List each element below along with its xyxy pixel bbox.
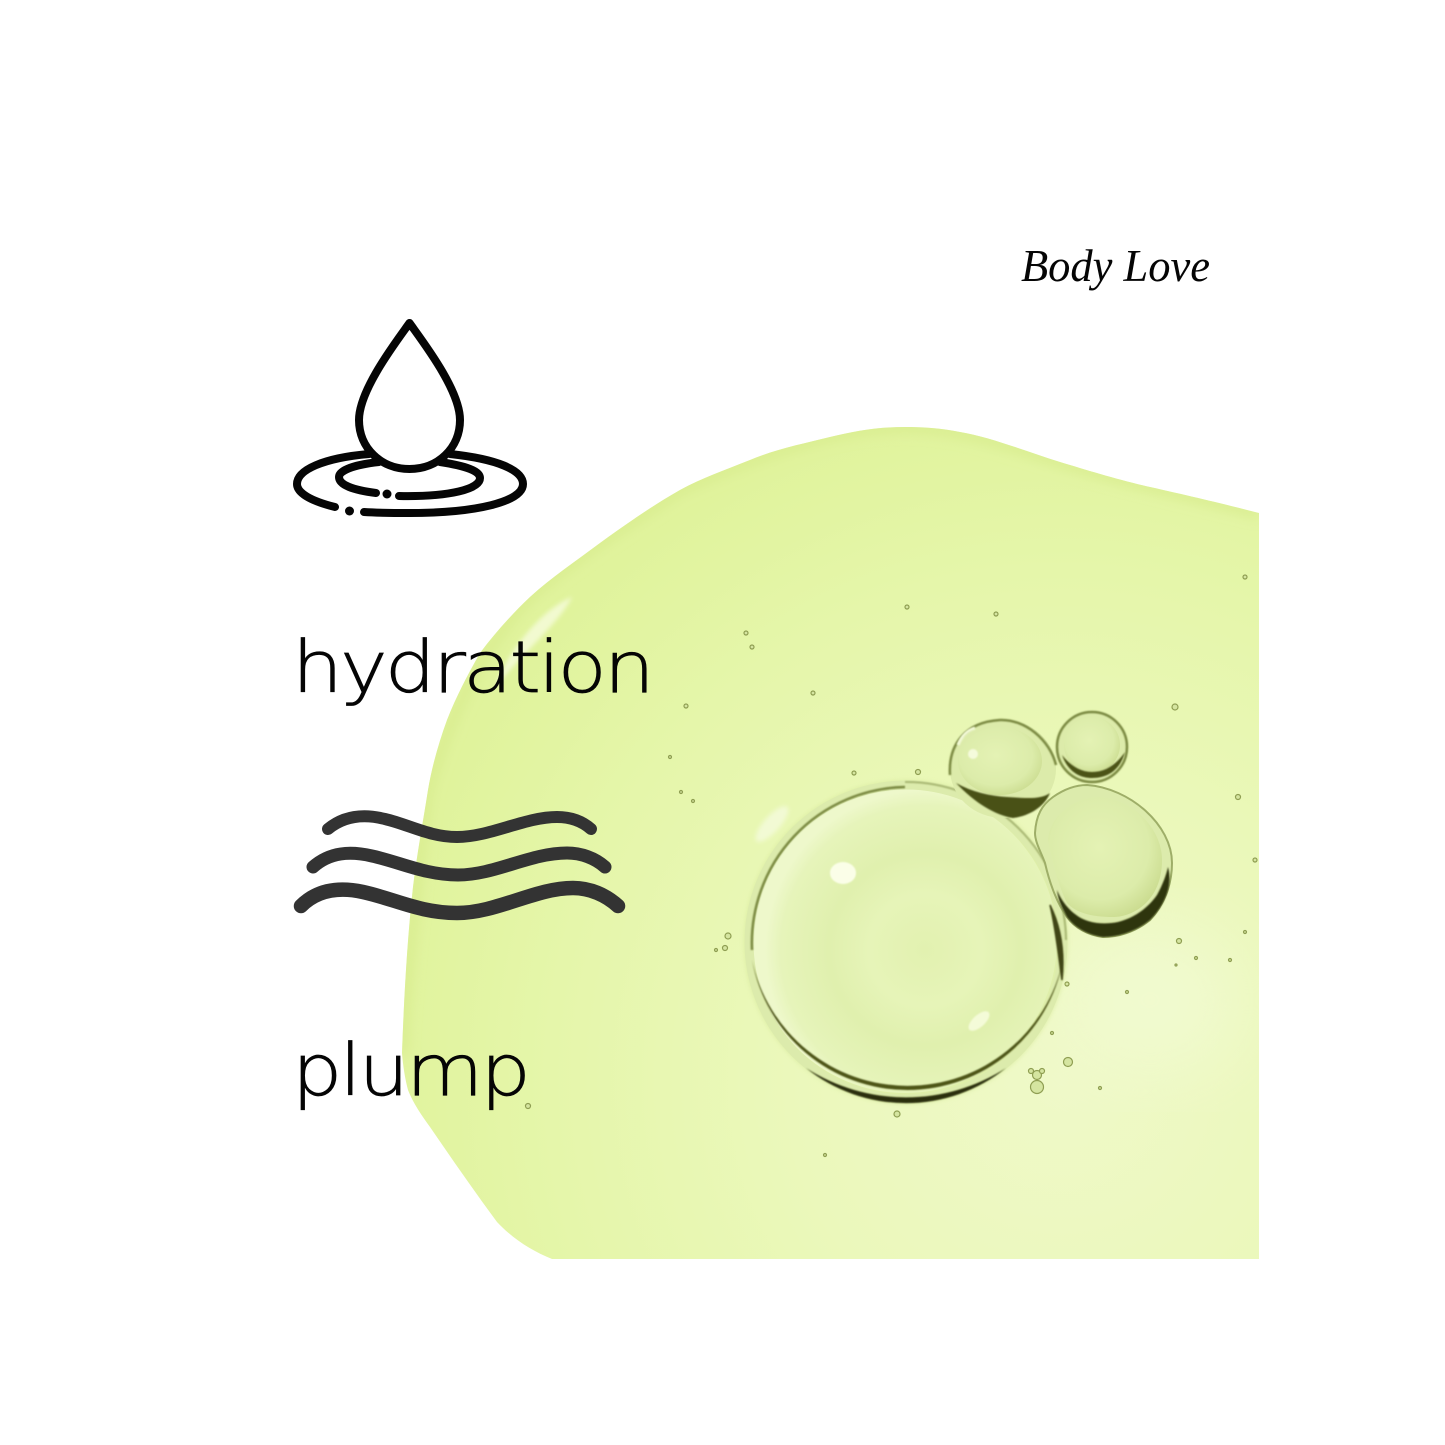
small bubble upper left — [950, 720, 1056, 818]
dark crescent — [1057, 867, 1169, 937]
brand name: Body Love — [1021, 240, 1210, 291]
icon: water drop with ripples — [297, 323, 523, 516]
wave three — [301, 888, 618, 913]
large bubble — [744, 780, 1068, 1104]
wave two — [313, 853, 605, 875]
bubble glints — [830, 862, 856, 884]
dark rim crescent — [752, 960, 1063, 1090]
label: plump: plump — [292, 1029, 528, 1112]
oil swatch — [390, 410, 1270, 1270]
small bubble top — [1056, 711, 1128, 783]
drop — [359, 323, 460, 469]
highlight by large bubble — [754, 805, 790, 843]
wave one — [328, 816, 591, 837]
tiny air bubbles — [526, 575, 1257, 1156]
inner ripple — [399, 462, 480, 496]
highlight on swatch edge — [495, 597, 572, 688]
oval bubble right — [1035, 785, 1172, 937]
icon: waves — [301, 816, 618, 913]
label: hydration: hydration — [292, 626, 652, 709]
infographic canvas — [293, 249, 1259, 1259]
outer ripple — [364, 454, 523, 513]
inner ripple left — [339, 462, 379, 493]
ripple dots — [345, 490, 392, 516]
glint lower right — [965, 1008, 993, 1034]
outer ripple left — [297, 454, 369, 507]
